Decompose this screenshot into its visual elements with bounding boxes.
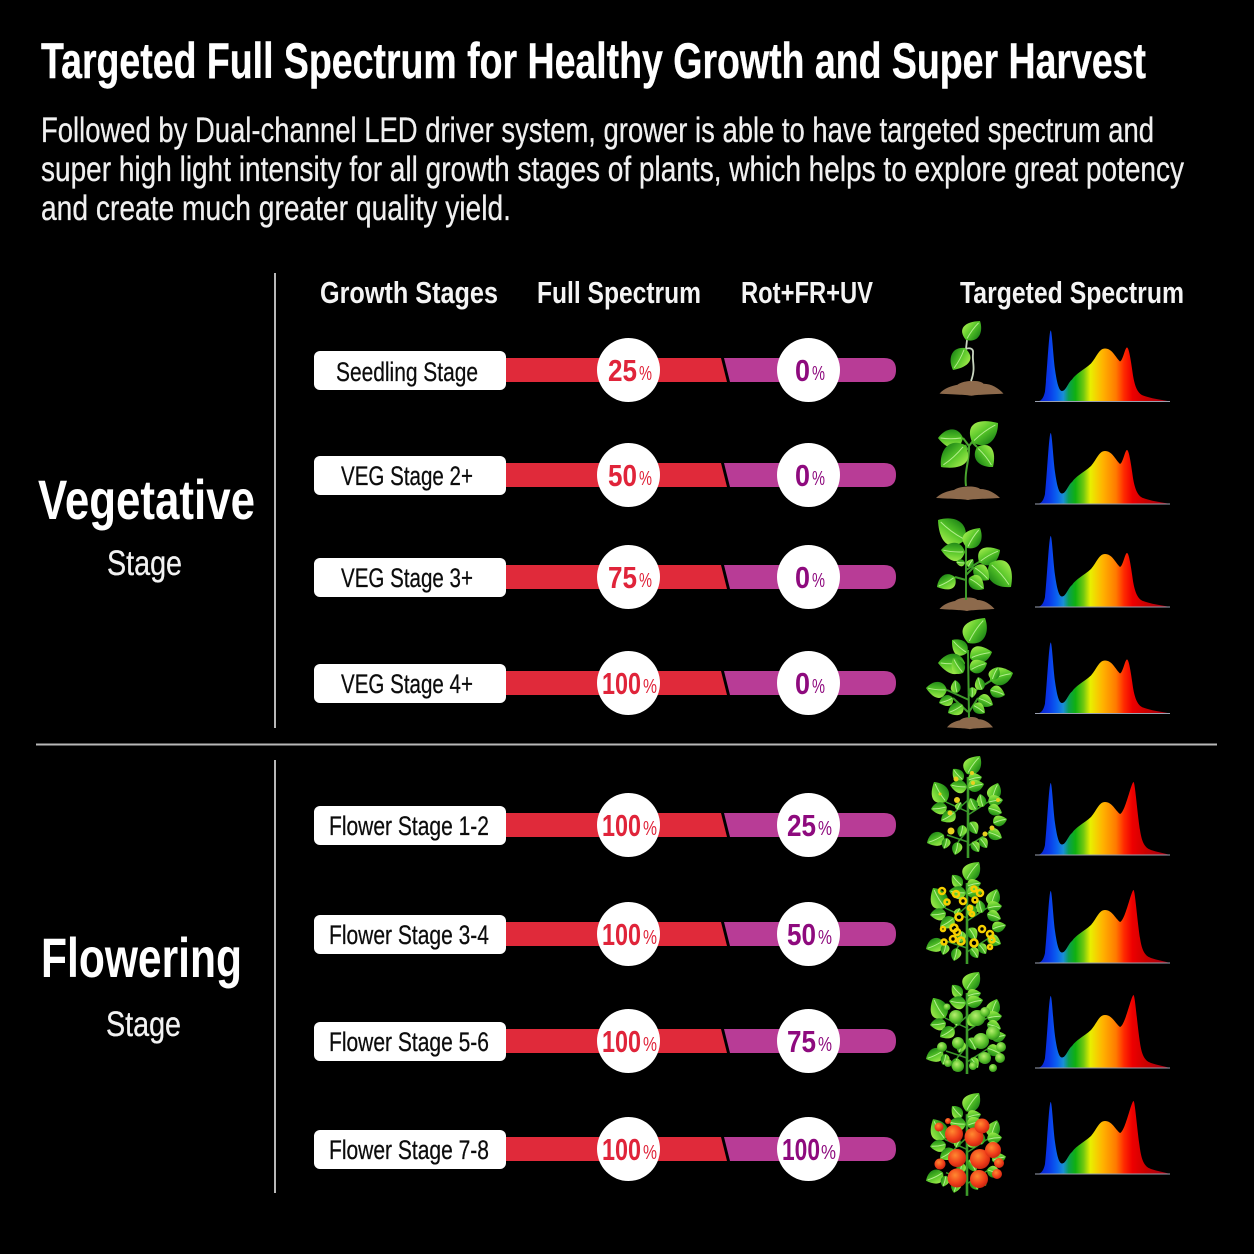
row: veg stage 4: VEG Stage 4+ [341, 669, 473, 699]
row: veg stage 2 [314, 443, 896, 507]
row: flower stage 5-6: % [643, 1034, 657, 1056]
chart: spectrum flower 1-2 [1035, 782, 1170, 855]
row: veg stage 3: 75 [608, 560, 637, 595]
row: flower stage 3-4: 50 [787, 917, 816, 952]
column headers: Growth Stages [320, 275, 498, 310]
row: flower stage 7-8: % [643, 1142, 657, 1164]
column headers: Targeted Spectrum [960, 275, 1184, 310]
row: flower stage 7-8 [314, 1117, 896, 1181]
row: veg stage 3: VEG Stage 3+ [341, 563, 473, 593]
icon: bushy plant [925, 611, 1015, 729]
row: flower stage 7-8: 100 [602, 1132, 641, 1167]
row: seedling stage: % [639, 363, 652, 385]
row: flower stage 3-4: Flower Stage 3-4 [329, 920, 489, 950]
row: seedling stage: % [812, 363, 825, 385]
row: veg stage 4: 100 [602, 666, 641, 701]
heading: flowering stage: Flowering [41, 926, 242, 989]
column headers: Full Spectrum [537, 275, 701, 310]
icon: seedling [940, 315, 1004, 396]
row: veg stage 4: % [643, 676, 657, 698]
row: veg stage 3: 0 [795, 560, 810, 595]
intro paragraph: and create much greater quality yield. [41, 189, 511, 228]
row: flower stage 1-2: Flower Stage 1-2 [329, 811, 489, 841]
row: flower stage 3-4: % [818, 927, 832, 949]
chart: spectrum flower 3-4 [1035, 890, 1170, 963]
row: veg stage 2: 0 [795, 458, 810, 493]
heading: vegetative stage: Vegetative [38, 468, 255, 531]
row: veg stage 3: % [812, 570, 825, 592]
row: veg stage 2: % [639, 468, 652, 490]
row: flower stage 3-4: % [643, 927, 657, 949]
chart: spectrum flower 5-6 [1035, 995, 1170, 1068]
row: seedling stage [314, 338, 896, 402]
row: veg stage 2: VEG Stage 2+ [341, 461, 473, 491]
row: veg stage 2: 50 [608, 458, 637, 493]
row: flower stage 3-4: 100 [602, 917, 641, 952]
icon: green fruit plant [923, 967, 1007, 1074]
row: flower stage 7-8: % [821, 1142, 836, 1164]
heading: vegetative stage [38, 468, 255, 583]
column headers [320, 275, 1184, 310]
column headers: Rot+FR+UV [741, 275, 873, 310]
row: flower stage 1-2: % [818, 818, 832, 840]
icon: leafy plant [930, 511, 1021, 611]
row: veg stage 2: % [812, 468, 825, 490]
row: veg stage 4: % [812, 676, 825, 698]
row: flower stage 1-2: % [643, 818, 657, 840]
row: flower stage 1-2: 25 [787, 808, 816, 843]
chart: spectrum veg 3 [1035, 536, 1170, 607]
row: flower stage 5-6: Flower Stage 5-6 [329, 1027, 489, 1057]
row: seedling stage: 25 [608, 353, 637, 388]
row: flower stage 5-6 [314, 1009, 896, 1073]
row: flower stage 1-2 [314, 793, 896, 857]
row: veg stage 3: % [639, 570, 652, 592]
chart: spectrum veg 4 [1035, 642, 1170, 714]
icon: young plant [933, 412, 1005, 500]
row: flower stage 5-6: % [818, 1034, 832, 1056]
heading: flowering stage: Stage [106, 1005, 181, 1044]
row: flower stage 7-8: 100 [782, 1132, 820, 1167]
row: veg stage 4: 0 [795, 666, 810, 701]
row: seedling stage: Seedling Stage [336, 357, 478, 387]
chart: spectrum flower 7-8 [1035, 1101, 1170, 1174]
heading: flowering stage [41, 926, 242, 1044]
intro paragraph [41, 111, 1184, 228]
row: flower stage 1-2: 100 [602, 808, 641, 843]
row: veg stage 3 [314, 545, 896, 609]
chart: spectrum veg 2 [1035, 433, 1170, 504]
icon: ripe tomato plant [923, 1088, 1007, 1196]
chart: spectrum seedling [1035, 330, 1170, 402]
row: flower stage 7-8: Flower Stage 7-8 [329, 1135, 489, 1165]
row: seedling stage: 0 [795, 353, 810, 388]
row: flower stage 3-4 [314, 902, 896, 966]
heading: vegetative stage: Stage [107, 544, 182, 583]
row: flower stage 5-6: 100 [602, 1024, 641, 1059]
row: veg stage 4 [314, 651, 896, 715]
icon: flowering plant [923, 857, 1007, 964]
icon: budding plant [924, 751, 1008, 858]
row: flower stage 5-6: 75 [787, 1024, 816, 1059]
